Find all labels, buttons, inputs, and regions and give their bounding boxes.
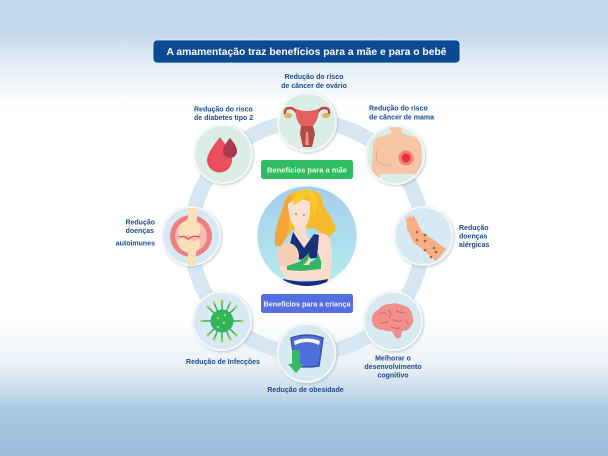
title banner [153, 40, 460, 63]
forearm [279, 265, 318, 280]
label: benefits for child: Benefícios para a criança [264, 300, 351, 308]
label: ovarian cancer: Redução do risco [285, 74, 343, 81]
label: benefits for child [261, 294, 353, 313]
label: benefits for mother: Benefícios para a mãe [267, 166, 347, 174]
label: ovarian cancer: de câncer de ovário [281, 83, 347, 90]
title banner: A amamentação traz benefícios para a mãe e para o bebê [166, 46, 447, 58]
hair back [275, 190, 336, 247]
icon: breast [366, 125, 424, 184]
label: cognitive: Melhorar o [375, 356, 411, 362]
label: breast cancer: Redução do risco [369, 106, 428, 112]
baby head [277, 243, 299, 269]
label: diabetes: de diabetes tipo 2 [194, 115, 253, 122]
green blanket [287, 253, 321, 271]
label: breast cancer: de câncer de mama [369, 114, 434, 122]
portrait: mother breastfeeding [257, 186, 357, 286]
navy top [289, 232, 319, 260]
label: benefits for mother [261, 160, 353, 179]
icon: ovary [278, 93, 336, 151]
label: autoimmune: autoimunes [116, 240, 155, 248]
label: infections: Redução de Infecções [186, 359, 260, 366]
hair top [293, 190, 317, 216]
icon: weighing scale [278, 324, 336, 382]
icon: virus [193, 292, 251, 350]
neck and chest [294, 225, 310, 248]
face [288, 199, 310, 228]
benefits ring [191, 122, 423, 354]
right arm [317, 233, 332, 280]
label: obesity: Redução de obesidade [267, 387, 344, 394]
icon: arm with rash [394, 207, 452, 265]
icon: blood drops [194, 125, 252, 183]
label: autoimmune: doenças [126, 228, 154, 235]
label: diabetes: Redução do risco [194, 106, 253, 114]
label: allergies: Redução [459, 225, 489, 232]
label: cognitive: cognitivo [377, 372, 409, 380]
label: cognitive: desenvolvimento [364, 364, 422, 371]
label: autoimmune: Redução [125, 220, 155, 226]
navy skirt [283, 279, 328, 286]
label: allergies: doenças [459, 234, 488, 240]
icon: knee joint [162, 207, 220, 265]
label: allergies: alérgicas [459, 242, 489, 249]
icon: brain [364, 292, 422, 350]
